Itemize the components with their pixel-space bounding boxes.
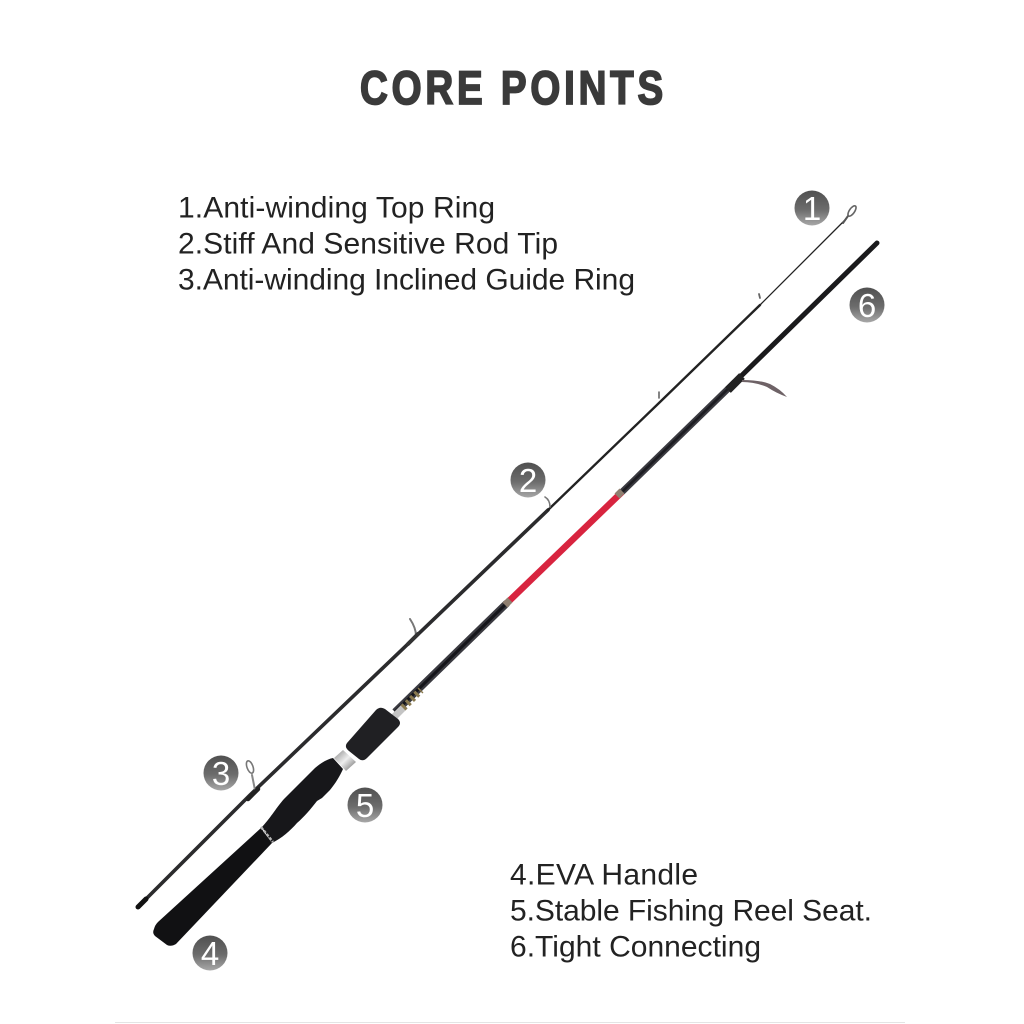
lower rod section (392, 243, 877, 719)
icon: guide ring lower (408, 619, 418, 644)
reel seat threads (392, 690, 421, 719)
feature list: rod tip section: 1.Anti-winding Top Ring (178, 192, 495, 224)
marker 1: 1 (803, 190, 821, 227)
winding ring (261, 827, 273, 842)
feature list: rod tip section: 3.Anti-winding Inclined Guide Ring (178, 264, 635, 296)
marker 3: 3 (212, 755, 230, 792)
rear EVA grip (153, 828, 272, 946)
marker 3 (204, 755, 238, 792)
marker 2: 2 (519, 462, 537, 499)
marker 6: 6 (858, 287, 876, 324)
icon: small guide ring near tip (759, 294, 760, 298)
front grip (346, 708, 400, 760)
icon: middle guide ring (658, 392, 660, 398)
title: CORE POINTS (360, 62, 667, 115)
icon: guide ring at marker 2 (545, 497, 550, 507)
marker 4: 4 (201, 935, 219, 972)
feature list: handle section: 5.Stable Fishing Reel Seat. (510, 894, 872, 928)
feature list: handle section (510, 858, 872, 964)
red rod segment (507, 492, 622, 603)
handle (153, 708, 400, 946)
marker 4 (192, 935, 228, 972)
feature list: handle section: 4.EVA Handle (510, 858, 698, 892)
icon: stripper guide (728, 376, 787, 397)
feature list: handle section: 6.Tight Connecting (510, 930, 761, 964)
feature list: rod tip section (178, 192, 635, 296)
marker 6 (850, 287, 884, 324)
marker 2 (510, 462, 546, 499)
metal collar (334, 750, 356, 771)
marker 5 (348, 787, 382, 824)
marker 1 (794, 190, 830, 227)
feature list: rod tip section: 2.Stiff And Sensitive Rod Tip (178, 228, 558, 260)
marker 5: 5 (356, 787, 374, 824)
fore EVA grip bulge (262, 758, 343, 843)
icon: inclined guide ring (245, 760, 258, 799)
icon: top ring guide (843, 205, 858, 223)
upper rod section (138, 205, 858, 907)
